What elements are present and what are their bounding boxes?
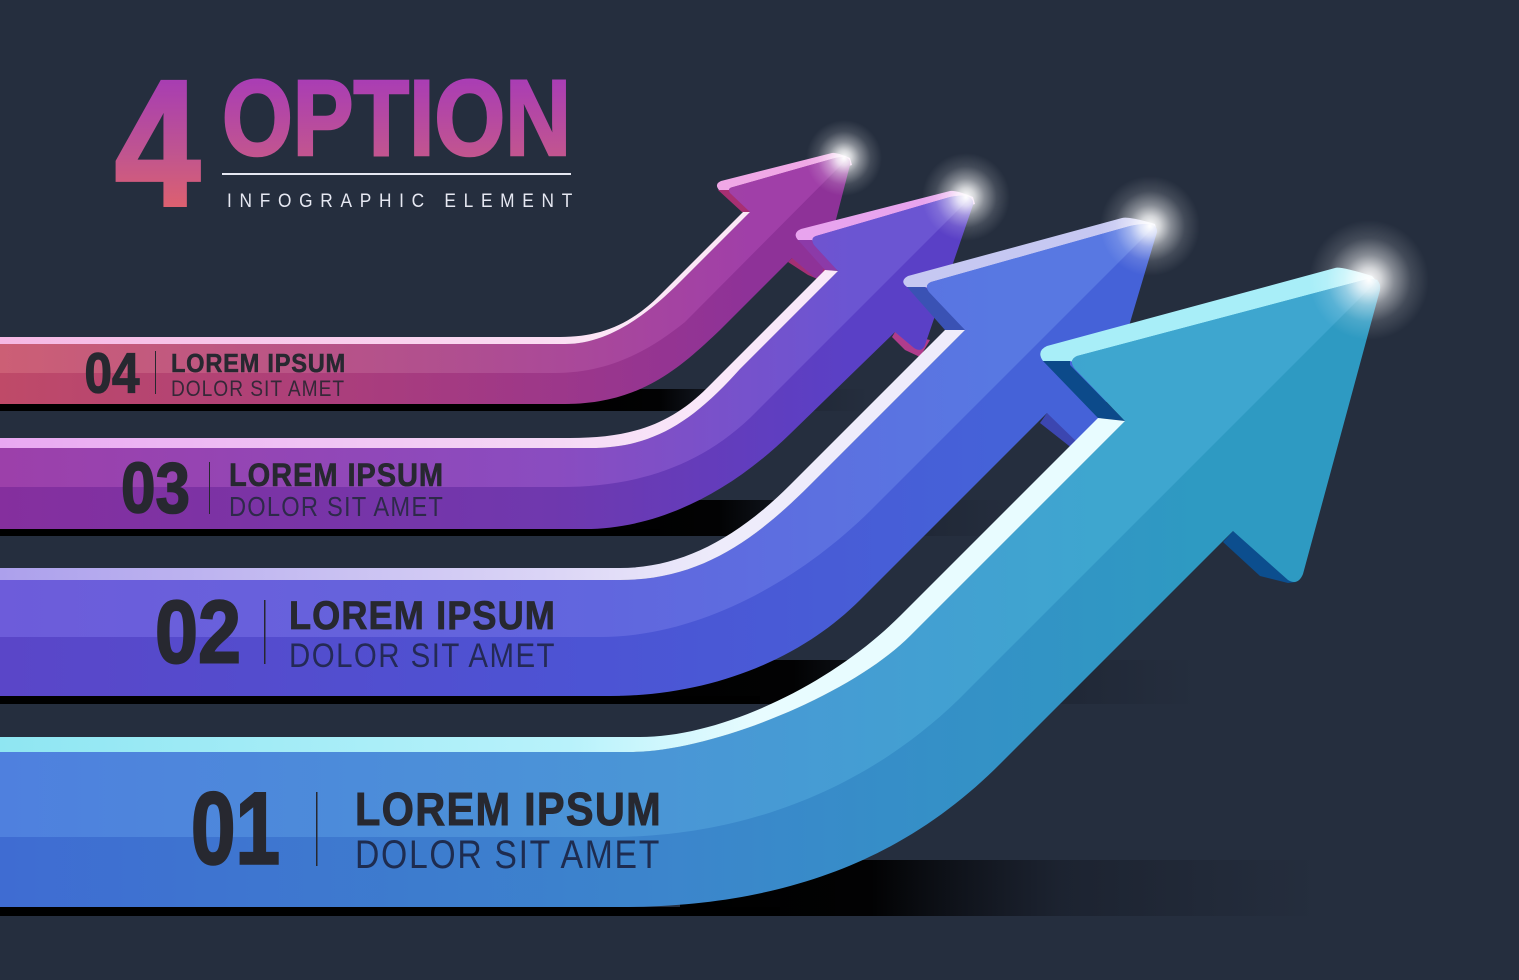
title [115,43,580,243]
label 03: DOLOR SIT AMET [229,491,444,522]
label 02: LOREM IPSUM [289,594,556,638]
label 03 [121,450,444,528]
label 01: DOLOR SIT AMET [355,833,661,877]
label 01: LOREM IPSUM [355,783,662,835]
label 04: LOREM IPSUM [171,348,346,378]
label 01: 01 [191,772,280,886]
arrow 03 [0,153,1020,536]
arrow 04 [0,120,882,411]
arrow 01 [0,220,1429,916]
label 02: DOLOR SIT AMET [289,637,556,675]
label 04 [84,342,346,406]
arrow 02 [0,176,1200,704]
label 04: 04 [84,342,140,406]
word OPTION: OPTION [222,57,571,178]
label 03: 03 [121,450,190,528]
subtitle INFOGRAPHIC ELEMENT: INFOGRAPHIC ELEMENT [227,191,580,212]
label 02 [155,582,556,682]
label 03: LOREM IPSUM [229,457,444,493]
label 04: DOLOR SIT AMET [171,376,345,401]
numeral 4: 4 [115,43,200,243]
label 02: 02 [155,582,241,682]
label 01 [191,772,662,886]
